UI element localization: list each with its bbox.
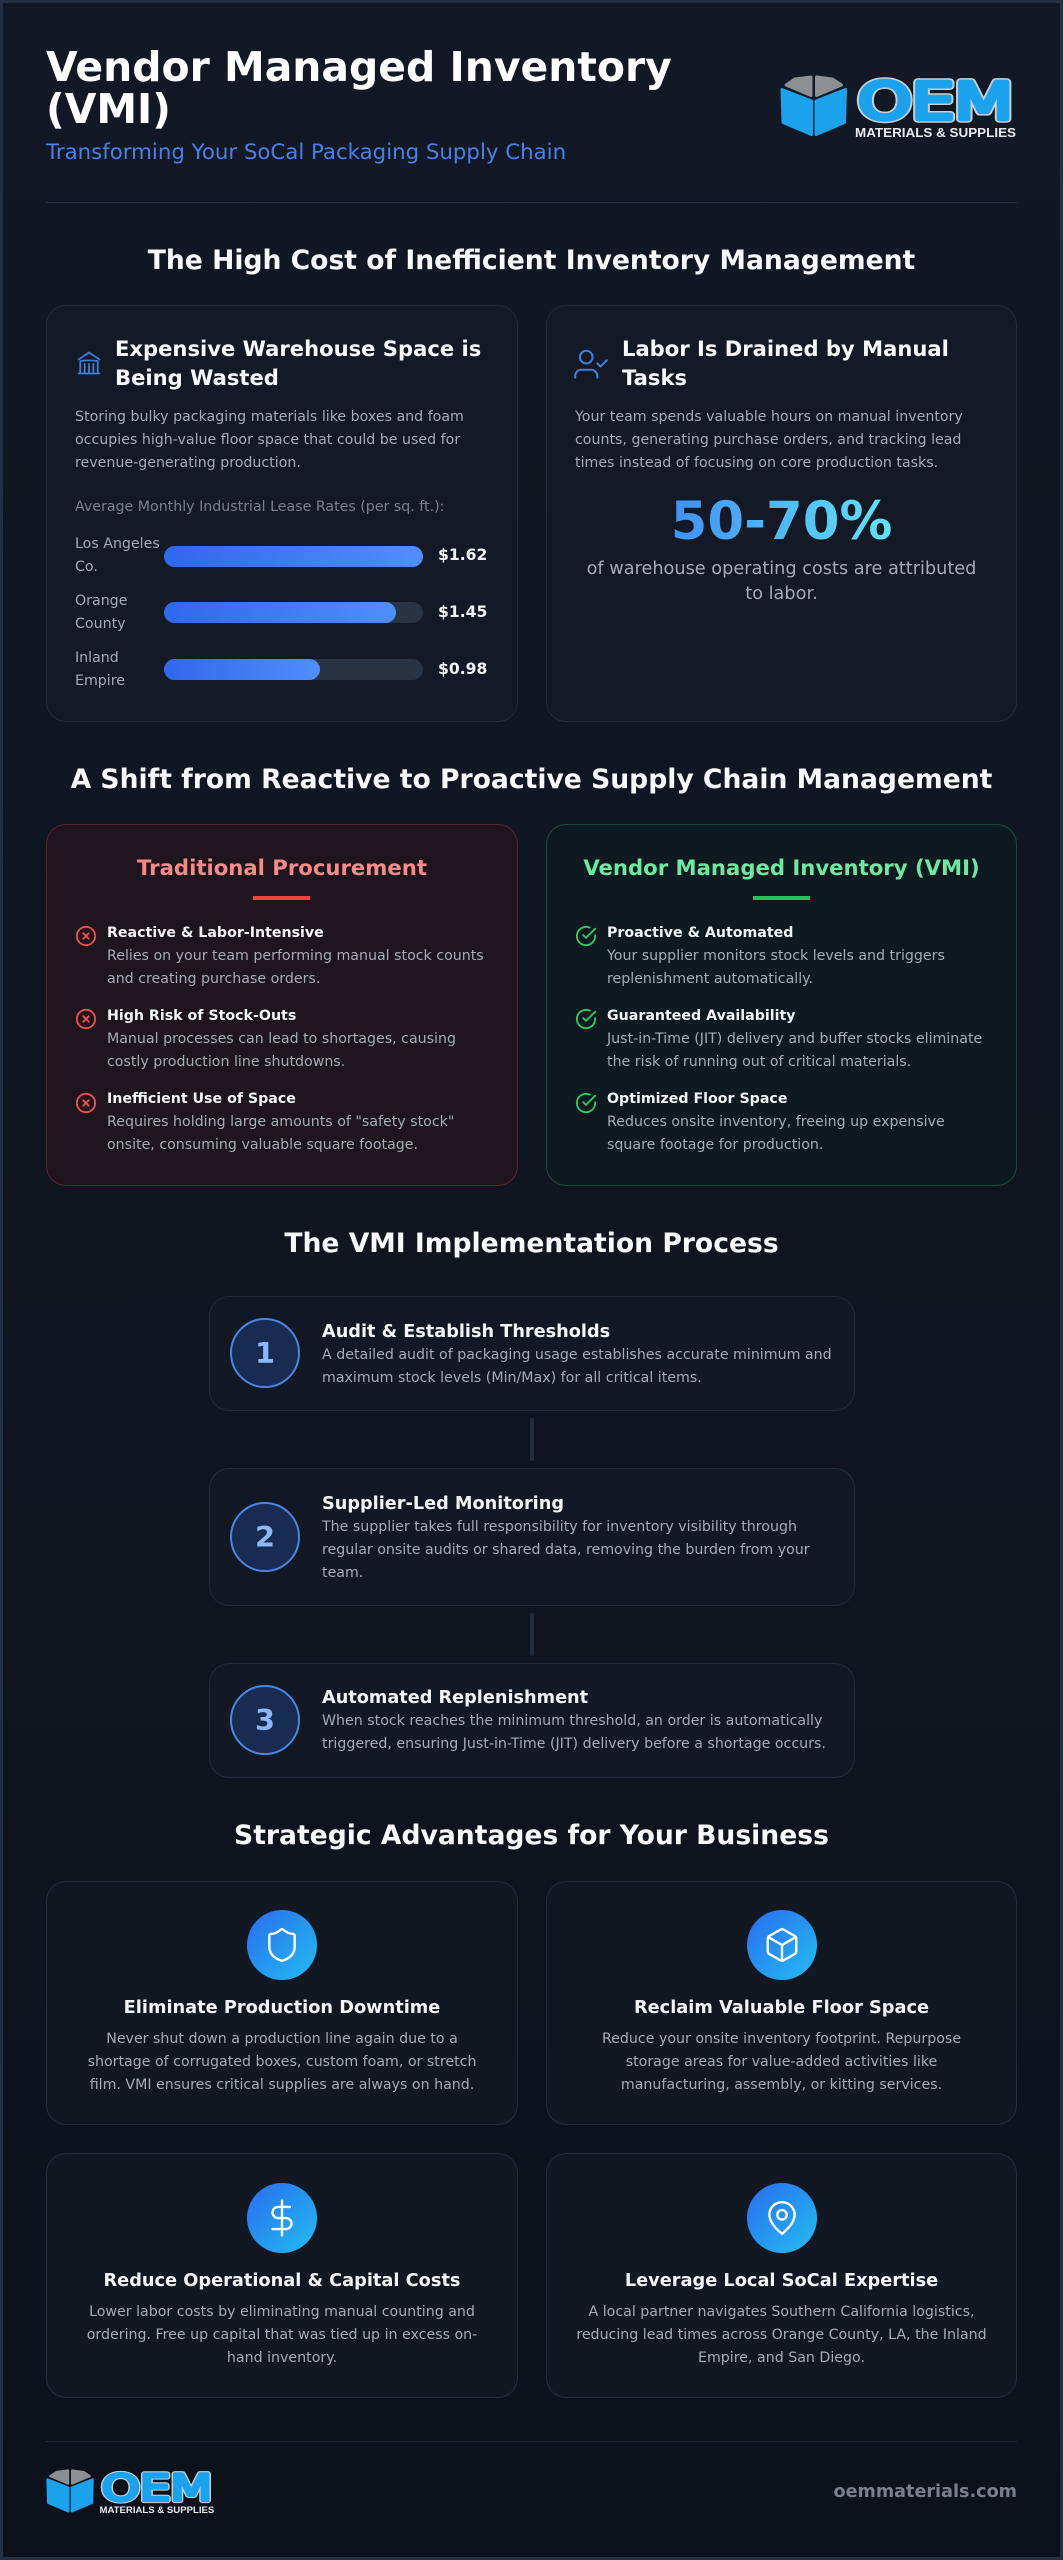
item: reactive: Reactive & Labor-Intensive: [107, 924, 324, 940]
item: proactive: Proactive & Automated: [607, 924, 793, 940]
bar: Orange County: [164, 602, 423, 623]
panel text: times instead of focusing on core production tasks.: [575, 455, 938, 471]
stat caption: to labor.: [745, 584, 818, 604]
icon: box: [746, 1910, 816, 1980]
card title: Reduce Operational & Capital Costs: [103, 2271, 460, 2291]
panel heading: [115, 336, 481, 390]
step text: maximum stock levels (Min/Max) for all critical items.: [322, 1370, 702, 1386]
card text: Empire, and San Diego.: [698, 2350, 865, 2366]
panel text: revenue-generating production.: [75, 455, 301, 471]
icon: check circle: [576, 1008, 596, 1030]
item: floor space: square footage for production.: [607, 1137, 823, 1153]
card: costs: [46, 2153, 518, 2398]
item: floor space: [576, 1091, 945, 1153]
heading: shift: A Shift from Reactive to Proactive Supply Chain Management: [71, 764, 992, 795]
footer logo: [46, 2469, 214, 2514]
card text: Never shut down a production line again due to a: [106, 2030, 458, 2046]
item: stock-outs: High Risk of Stock-Outs: [107, 1008, 296, 1024]
bar chart: lease rates: [75, 536, 487, 688]
panel heading: Being Wasted: [115, 365, 279, 390]
card text: Reduce your onsite inventory footprint. Repurpose: [602, 2030, 961, 2046]
label: Los Angeles: Los Angeles: [75, 536, 160, 552]
step number: [230, 1318, 300, 1388]
panel: labor: [546, 305, 1017, 722]
item: floor space: Reduces onsite inventory, freeing up expensive: [607, 1114, 945, 1130]
card text: hand inventory.: [227, 2350, 337, 2366]
icon: dollar: [246, 2183, 316, 2253]
card text: [88, 2030, 476, 2092]
label: Orange County: Orange: [75, 593, 127, 609]
panel text: [75, 409, 464, 471]
panel title: Vendor Managed Inventory (VMI): [583, 855, 980, 880]
step number: 2: [255, 1520, 275, 1554]
chart caption: Average Monthly Industrial Lease Rates (per sq. ft.):: [75, 499, 444, 515]
panel heading: Labor Is Drained by Manual: [622, 336, 949, 361]
stat caption: [587, 558, 976, 604]
value: Los Angeles: $1.62: [438, 546, 487, 564]
item: reactive: and creating purchase orders.: [107, 970, 320, 986]
panel heading: Expensive Warehouse Space is: [115, 336, 481, 361]
icon: x circle: [76, 1008, 96, 1030]
bar: Los Angeles: [164, 546, 423, 567]
card: downtime: [46, 1881, 518, 2125]
item: availability: Guaranteed Availability: [607, 1008, 795, 1024]
panel title: Traditional Procurement: [137, 855, 427, 880]
panel: traditional procurement: [46, 824, 518, 1186]
item: reactive: Relies on your team performing manual stock counts: [107, 948, 484, 964]
step 3: [209, 1663, 855, 1778]
label: Los Angeles: Co.: [75, 559, 98, 575]
item: reactive: [76, 924, 484, 986]
panel text: Storing bulky packaging materials like boxes and foam: [75, 409, 464, 425]
item: availability: [576, 1008, 982, 1070]
label: Orange County: [75, 593, 127, 632]
step number: [230, 1502, 300, 1572]
header title: [46, 43, 672, 133]
step 1: [209, 1296, 855, 1411]
card title: Reclaim Valuable Floor Space: [634, 1998, 929, 2018]
item: space: Inefficient Use of Space: [107, 1091, 296, 1107]
item: stock-outs: costly production line shutdowns.: [107, 1054, 345, 1070]
item: stock-outs: [76, 1008, 456, 1070]
item: stock-outs: Manual processes can lead to shortages, causing: [107, 1031, 456, 1047]
item: space: [76, 1091, 454, 1153]
header title: Vendor Managed Inventory: [46, 43, 672, 91]
panel: warehouse space: [46, 305, 518, 722]
card text: shortage of corrugated boxes, custom foam, or stretch: [88, 2054, 476, 2070]
step text: team.: [322, 1564, 363, 1580]
panel text: counts, generating purchase orders, and tracking lead: [575, 432, 961, 448]
panel heading: Tasks: [622, 365, 687, 390]
card text: ordering. Free up capital that was tied up in excess on-: [87, 2326, 477, 2342]
heading: advantages: Strategic Advantages for Your Business: [234, 1820, 829, 1851]
step text: [322, 1713, 826, 1752]
value: Inland Empire: $0.98: [438, 660, 487, 678]
footer website: oemmaterials.com: [833, 2482, 1017, 2502]
icon: map pin: [746, 2183, 816, 2253]
item: availability: Just-in-Time (JIT) delivery and buffer stocks eliminate: [607, 1031, 982, 1047]
label: Orange County: County: [75, 616, 126, 632]
card: floor space: [546, 1881, 1017, 2125]
label: Inland Empire: Inland: [75, 650, 119, 666]
icon: shield: [246, 1910, 316, 1980]
label: Inland Empire: Empire: [75, 672, 125, 688]
header title: (VMI): [46, 85, 171, 133]
card text: Lower labor costs by eliminating manual counting and: [89, 2304, 475, 2320]
label: Inland Empire: [75, 650, 125, 688]
icon: x circle: [76, 1092, 96, 1114]
step text: regular onsite audits or shared data, removing the burden from your: [322, 1542, 810, 1558]
step text: When stock reaches the minimum threshold, an order is automatically: [322, 1713, 822, 1729]
icon: warehouse building: [78, 352, 100, 374]
card text: reducing lead times across Orange County, LA, the Inland: [576, 2326, 987, 2342]
card text: manufacturing, assembly, or kitting services.: [621, 2076, 942, 2092]
icon: check circle: [576, 1092, 596, 1114]
card text: [87, 2304, 477, 2366]
panel text: [575, 409, 963, 471]
step title: Automated Replenishment: [322, 1688, 588, 1708]
step text: The supplier takes full responsibility for inventory visibility through: [322, 1518, 797, 1534]
item: space: Requires holding large amounts of "safety stock": [107, 1114, 454, 1130]
value: Orange County: $1.45: [438, 602, 487, 620]
card title: Eliminate Production Downtime: [124, 1998, 440, 2018]
stat caption: of warehouse operating costs are attributed: [587, 558, 976, 578]
step number: [230, 1685, 300, 1755]
card title: Leverage Local SoCal Expertise: [625, 2271, 938, 2291]
item: space: onsite, consuming valuable square footage.: [107, 1137, 418, 1153]
card text: [576, 2304, 987, 2366]
step 2: [209, 1468, 855, 1606]
step title: Audit & Establish Thresholds: [322, 1322, 610, 1342]
header subtitle: Transforming Your SoCal Packaging Supply Chain: [46, 140, 566, 165]
step title: Supplier-Led Monitoring: [322, 1494, 564, 1514]
item: floor space: Optimized Floor Space: [607, 1091, 787, 1107]
card: local expertise: [546, 2153, 1017, 2398]
card text: film. VMI ensures critical supplies are always on hand.: [90, 2076, 474, 2092]
panel text: occupies high-value floor space that could be used for: [75, 432, 460, 448]
step text: A detailed audit of packaging usage establishes accurate minimum and: [322, 1346, 832, 1362]
card text: A local partner navigates Southern California logistics,: [589, 2304, 974, 2320]
icon: user check: [574, 350, 608, 379]
bar: Inland Empire: [164, 659, 423, 680]
heading: process: The VMI Implementation Process: [284, 1228, 779, 1259]
item: proactive: Your supplier monitors stock levels and triggers: [607, 948, 945, 964]
step number: 3: [255, 1703, 275, 1737]
step number: 1: [255, 1336, 275, 1370]
item: proactive: [576, 924, 945, 986]
step text: [322, 1346, 832, 1386]
label: Los Angeles: [75, 536, 160, 575]
panel text: Your team spends valuable hours on manual inventory: [575, 409, 963, 425]
item: availability: the risk of running out of critical materials.: [607, 1054, 911, 1070]
logo: OEM Materials & Supplies: [780, 75, 1016, 138]
item: proactive: replenishment automatically.: [607, 970, 813, 986]
panel: VMI: [546, 824, 1017, 1186]
step text: [322, 1518, 810, 1580]
panel heading: [622, 336, 949, 390]
card text: storage areas for value-added activities like: [626, 2054, 937, 2070]
icon: x circle: [76, 926, 96, 946]
step text: triggered, ensuring Just-in-Time (JIT) delivery before a shortage occurs.: [322, 1736, 826, 1752]
card text: [602, 2030, 961, 2092]
icon: check circle: [576, 926, 596, 946]
heading: high cost: The High Cost of Inefficient Inventory Management: [148, 245, 915, 276]
big stat: 50-70%: [671, 491, 892, 552]
